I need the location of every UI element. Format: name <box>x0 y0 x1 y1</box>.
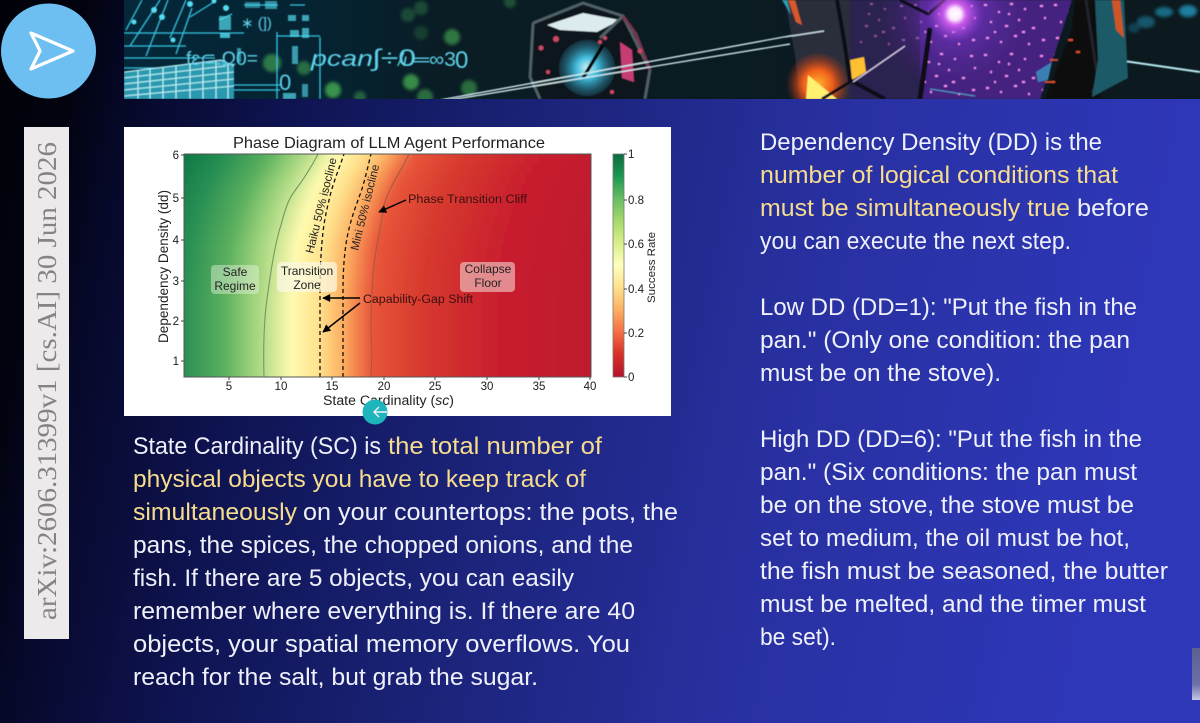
text block: state cardinality: fish. If there are 5 objects, you can easily <box>133 565 574 592</box>
blue bokeh streak <box>1128 5 1197 33</box>
x axis: 40 <box>584 381 596 393</box>
y axis <box>156 150 184 368</box>
region label: safe regime: Regime <box>214 279 256 293</box>
heatmap <box>184 154 590 376</box>
x axis: 30 <box>481 381 493 393</box>
x axis: State Cardinality ( sc) <box>323 393 454 408</box>
equation text: ∗ (]) <box>241 15 272 32</box>
region label: transition zone: Zone <box>293 278 321 292</box>
text block: state cardinality: simultaneously <box>133 499 297 526</box>
text block: low DD example <box>760 294 1137 387</box>
text block: dependency density definition <box>760 129 1149 255</box>
y axis: 1 <box>173 356 179 368</box>
annotation: capability-gap shift: Capability-Gap Shift <box>363 294 474 306</box>
x axis <box>226 377 596 408</box>
region label: transition zone <box>277 262 337 292</box>
text block: state cardinality: the total number of <box>388 433 602 460</box>
arXiv side stamp <box>24 127 69 639</box>
region label: transition zone: Transition <box>281 264 333 278</box>
text block: high DD example <box>760 426 1168 651</box>
colorbar: 1 <box>628 149 634 161</box>
text block: dependency density definition: number of logical conditions that <box>760 162 1118 189</box>
equation text: 0 <box>279 70 291 95</box>
equation text: 0 <box>455 47 468 74</box>
equation text: ═∞3 <box>413 49 456 71</box>
arXiv side stamp: arXiv:2606.31399v1 [cs.AI] 30 Jun 2026 <box>32 142 62 620</box>
text block: dependency density definition: before <box>1077 195 1149 222</box>
isocline labels: Mini 50% isocline <box>349 163 382 252</box>
text block: state cardinality: reach for the salt, but grab the sugar. <box>133 664 538 691</box>
region label: collapse floor: Collapse <box>465 262 512 276</box>
text block: high DD example: the fish must be seasoned, the butter <box>760 558 1168 585</box>
colorbar <box>613 149 658 384</box>
text block: high DD example: be on the stove, the stove must be <box>760 492 1134 519</box>
region label: safe regime: Safe <box>223 265 248 279</box>
y axis: 3 <box>173 276 179 288</box>
equation text: fɛ⊂.Ω0= <box>186 49 258 70</box>
y axis: 6 <box>173 150 179 162</box>
equation text: ∫÷0 <box>369 45 416 72</box>
isocline labels <box>304 157 382 255</box>
text block: state cardinality: on your countertops: the pots, the <box>303 499 678 526</box>
x axis: 5 <box>226 381 232 393</box>
x axis: 25 <box>429 381 441 393</box>
equation text <box>186 15 468 95</box>
text block: low DD example: pan." (Only one condition: the pan <box>760 327 1130 354</box>
y axis: 2 <box>173 316 179 328</box>
y axis: Dependency Density (dd) <box>156 190 171 343</box>
text block: high DD example: set to medium, the oil must be hot, <box>760 525 1130 552</box>
text block: low DD example: must be on the stove). <box>760 360 1001 387</box>
colorbar: 0.6 <box>628 239 644 251</box>
isocline labels: Haiku 50% isocline <box>304 157 340 255</box>
text block: state cardinality: objects, your spatial memory overflows. You <box>133 631 630 658</box>
x axis: 35 <box>533 381 545 393</box>
text block: high DD example: High DD (DD=6): "Put the fish in the <box>760 426 1142 453</box>
text block: high DD example: pan." (Six conditions: the pan must <box>760 459 1137 486</box>
presenter thumbnail sliver <box>1192 648 1200 700</box>
text block: dependency density definition: Dependency Density (DD) is the <box>760 129 1102 156</box>
x axis: 15 <box>326 381 338 393</box>
region label: safe regime <box>211 265 259 294</box>
annotation: capability-gap shift <box>323 294 474 332</box>
colorbar: Success Rate <box>646 232 658 303</box>
icon: send button <box>1 4 96 98</box>
text block: state cardinality: remember where everything is. If there are 40 <box>133 598 635 625</box>
text block: state cardinality <box>133 433 678 691</box>
text block: state cardinality: pans, the spices, the chopped onions, and the <box>133 532 633 559</box>
colorbar: 0.8 <box>628 195 644 207</box>
polyhedron one <box>530 3 650 99</box>
region label: collapse floor <box>460 262 515 292</box>
colorbar: 0.4 <box>628 284 645 296</box>
connecting light lines <box>440 30 1200 100</box>
annotation: phase transition cliff <box>379 194 528 212</box>
contour lines <box>264 154 409 377</box>
y axis: 4 <box>173 235 180 247</box>
equation text: pcan <box>310 46 373 71</box>
icon: teal back button <box>362 400 388 424</box>
colorbar: 0.2 <box>628 328 644 340</box>
dashed isoclines <box>320 154 371 377</box>
region label: collapse floor: Floor <box>474 276 502 290</box>
text block: dependency density definition: must be simultaneously true <box>760 195 1070 222</box>
x axis: 20 <box>378 381 390 393</box>
y axis: 5 <box>173 193 179 205</box>
glowing crystal <box>782 0 1128 99</box>
equation text: /ι <box>396 50 407 70</box>
header image banner <box>124 0 1200 99</box>
panel: phase diagram <box>124 127 671 416</box>
text block: state cardinality: State Cardinality (SC) is <box>133 433 381 460</box>
text block: high DD example: be set). <box>760 624 836 651</box>
chart title: Phase Diagram of LLM Agent Performance <box>233 135 545 152</box>
grid block <box>124 60 234 99</box>
colorbar: 0 <box>628 372 634 384</box>
text block: high DD example: must be melted, and the timer must <box>760 591 1146 618</box>
text block: dependency density definition: you can execute the next step. <box>760 228 1071 255</box>
text block: low DD example: Low DD (DD=1): "Put the fish in the <box>760 294 1137 321</box>
text block: state cardinality: physical objects you have to keep track of <box>133 466 586 493</box>
plot frame <box>184 154 591 377</box>
annotation: phase transition cliff: Phase Transition Cliff <box>408 194 528 206</box>
x axis: 10 <box>275 381 287 393</box>
